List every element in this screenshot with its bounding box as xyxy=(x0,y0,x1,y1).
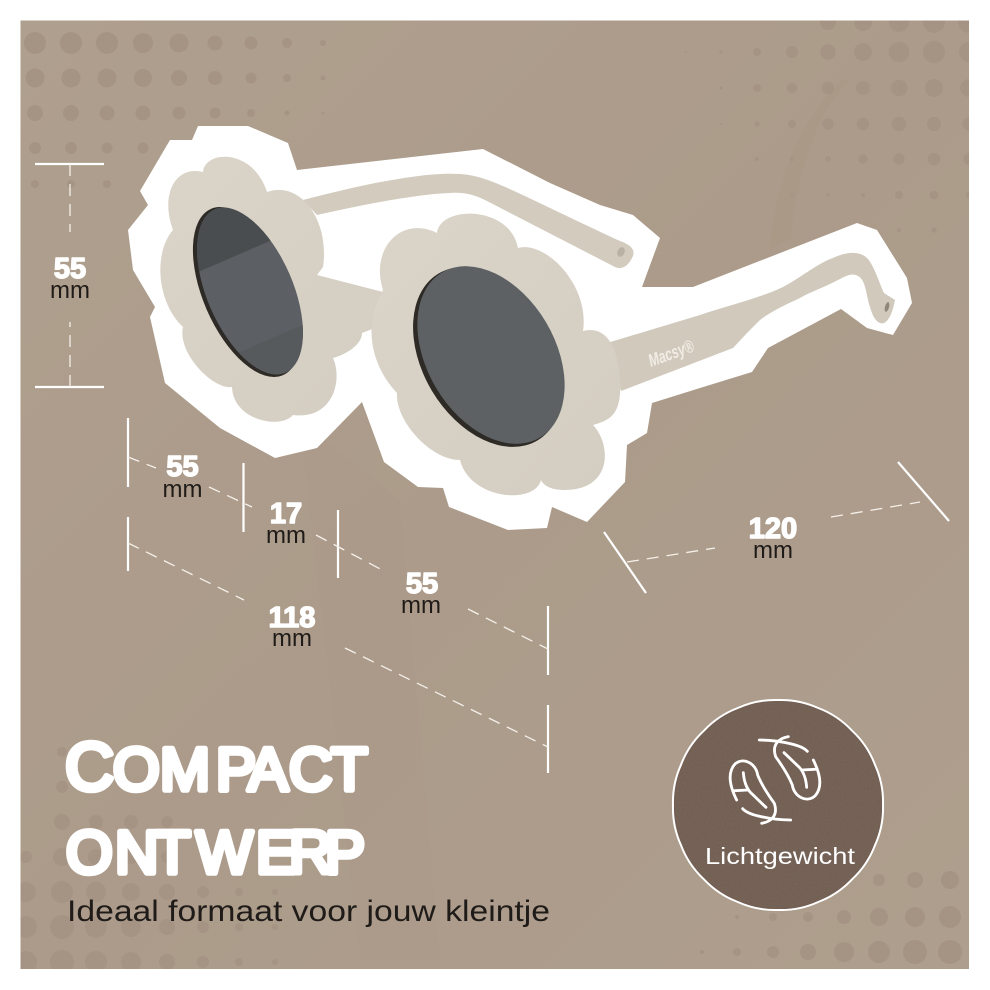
subtitle: Ideaal formaat voor jouw kleintje xyxy=(67,895,550,928)
right flower frame xyxy=(371,214,620,495)
front temple arm xyxy=(607,253,895,391)
left flower frame xyxy=(160,157,395,422)
dimension: lens height 55 mm: mm xyxy=(50,277,90,304)
right feather xyxy=(759,737,820,799)
dimension: total width 118 mm: 118 xyxy=(269,602,315,634)
title xyxy=(65,729,368,886)
dimension: temple length 120 mm xyxy=(604,462,949,593)
sunglasses illustration xyxy=(155,157,895,495)
badge: lichtgewicht xyxy=(673,700,883,910)
dimension: lens height 55 mm: 55 xyxy=(54,253,86,285)
back temple arm xyxy=(303,174,634,268)
dimension: lens width 55 mm: 55 xyxy=(166,451,199,483)
badge: lichtgewicht: Lichtgewicht xyxy=(705,843,856,869)
left lens xyxy=(192,207,303,377)
dimension: lens width 55 mm: mm xyxy=(163,476,202,503)
white sticker outline xyxy=(128,126,912,530)
right lens xyxy=(382,240,595,474)
dimension: second lens 55 mm: 55 xyxy=(406,568,438,600)
dimension: bridge 17 mm: 17 xyxy=(270,498,302,530)
dimension: second lens 55 mm xyxy=(401,568,548,675)
title: ONTWERP xyxy=(66,819,365,886)
dimension: second lens 55 mm: mm xyxy=(401,592,441,619)
brand on temple: Macsy® xyxy=(646,336,697,371)
dimension: total width 118 mm xyxy=(128,517,548,773)
dimension: lens height 55 mm xyxy=(35,164,104,387)
icon: feathers xyxy=(730,737,820,823)
dimension: total width 118 mm: mm xyxy=(272,625,312,652)
dimension: bridge 17 mm xyxy=(266,498,382,578)
title: COMPACT xyxy=(65,729,368,805)
dimension: bridge 17 mm: mm xyxy=(266,522,306,549)
dimension: lens width 55 mm xyxy=(128,418,252,532)
dimension: temple length 120 mm: 120 xyxy=(749,513,797,545)
left feather xyxy=(730,761,791,823)
dimension: temple length 120 mm: mm xyxy=(753,537,793,564)
